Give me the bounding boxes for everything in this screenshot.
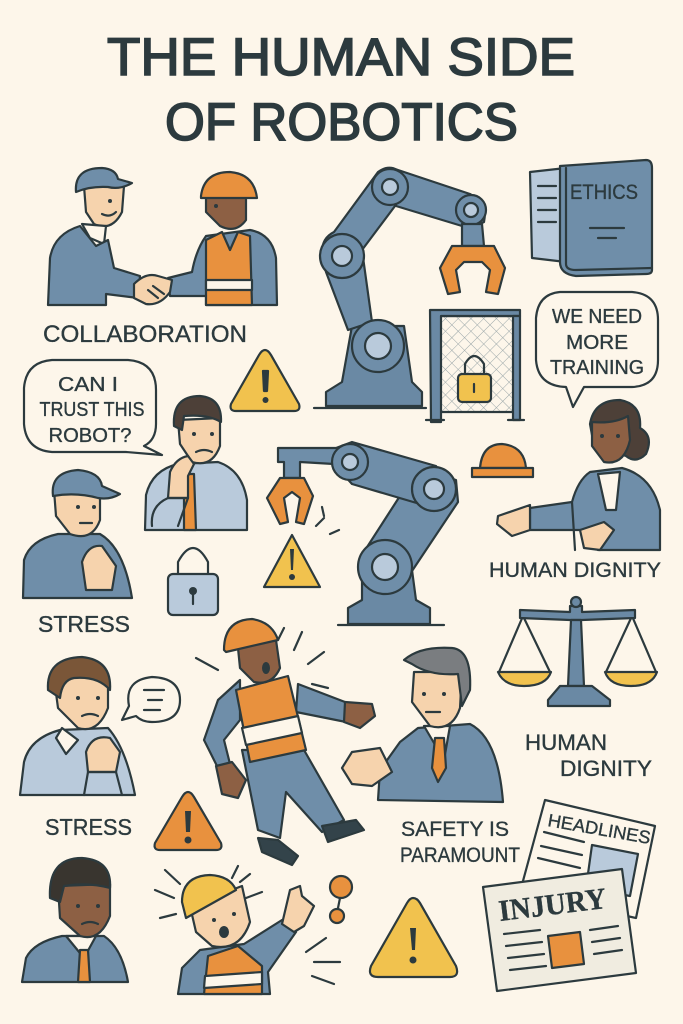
robot arm upper <box>314 168 505 408</box>
label: human dignity stacked: DIGNITY <box>560 756 652 781</box>
grey padlock <box>168 548 218 615</box>
label: human dignity: HUMAN DIGNITY <box>489 559 661 582</box>
woman in blue jacket <box>497 400 660 550</box>
ethics book: ETHICS <box>570 181 638 204</box>
panel: collaboration handshake <box>48 168 277 305</box>
speech bubble: we need more training: MORE <box>566 332 628 354</box>
speech bubble with lines <box>122 677 180 722</box>
title <box>107 28 575 152</box>
warning triangle lower with sparks <box>264 507 339 587</box>
newspaper: injury: INJURY <box>497 882 608 928</box>
worker falling, bottom centre <box>155 866 352 994</box>
scales of justice <box>498 597 657 706</box>
orange hard hat <box>472 444 533 477</box>
newspaper: injury <box>483 869 636 991</box>
worried man in light shirt <box>20 657 135 795</box>
label: safety is paramount: SAFETY IS <box>401 818 509 841</box>
speech bubble: we need more training <box>536 292 658 407</box>
ethics book <box>530 160 652 276</box>
warning triangle yellow <box>231 350 299 411</box>
worker with orange helmet <box>168 172 277 305</box>
speech bubble: can i trust this robot: ROBOT? <box>48 425 132 447</box>
warning triangle bottom <box>370 898 457 977</box>
label: collaboration: COLLABORATION <box>43 321 247 348</box>
label: human dignity stacked: HUMAN <box>525 730 607 755</box>
label: safety is paramount <box>400 818 520 867</box>
newspapers <box>483 800 655 991</box>
label: safety is paramount: PARAMOUNT <box>400 844 520 867</box>
label: stress: STRESS <box>38 611 130 637</box>
newspaper: headlines: HEADLINES <box>546 810 652 848</box>
speech bubble: we need more training: WE NEED <box>552 306 642 328</box>
man with tie, bottom left <box>22 858 128 982</box>
warning triangle orange <box>155 792 221 850</box>
label: human dignity stacked <box>525 730 652 781</box>
title: OF ROBOTICS <box>165 93 518 152</box>
speech bubble: can i trust this robot <box>24 360 162 455</box>
title: THE HUMAN SIDE <box>107 28 575 87</box>
manager in suit <box>342 648 503 802</box>
thinking man with tie <box>145 396 247 530</box>
clasped hands <box>134 275 172 304</box>
speech bubble: can i trust this robot: TRUST THIS <box>40 399 144 421</box>
falling worker in vest <box>196 619 375 865</box>
man with blue cap, hand on chin <box>23 470 132 598</box>
safety fence with padlock <box>426 310 524 422</box>
robot arm lower <box>267 442 458 625</box>
man with blue cap <box>48 168 140 305</box>
speech bubble: we need more training: TRAINING <box>550 357 644 379</box>
newspaper: headlines <box>520 800 655 918</box>
label: stress lower: STRESS <box>45 814 132 840</box>
speech bubble: can i trust this robot: CAN I <box>58 374 118 396</box>
